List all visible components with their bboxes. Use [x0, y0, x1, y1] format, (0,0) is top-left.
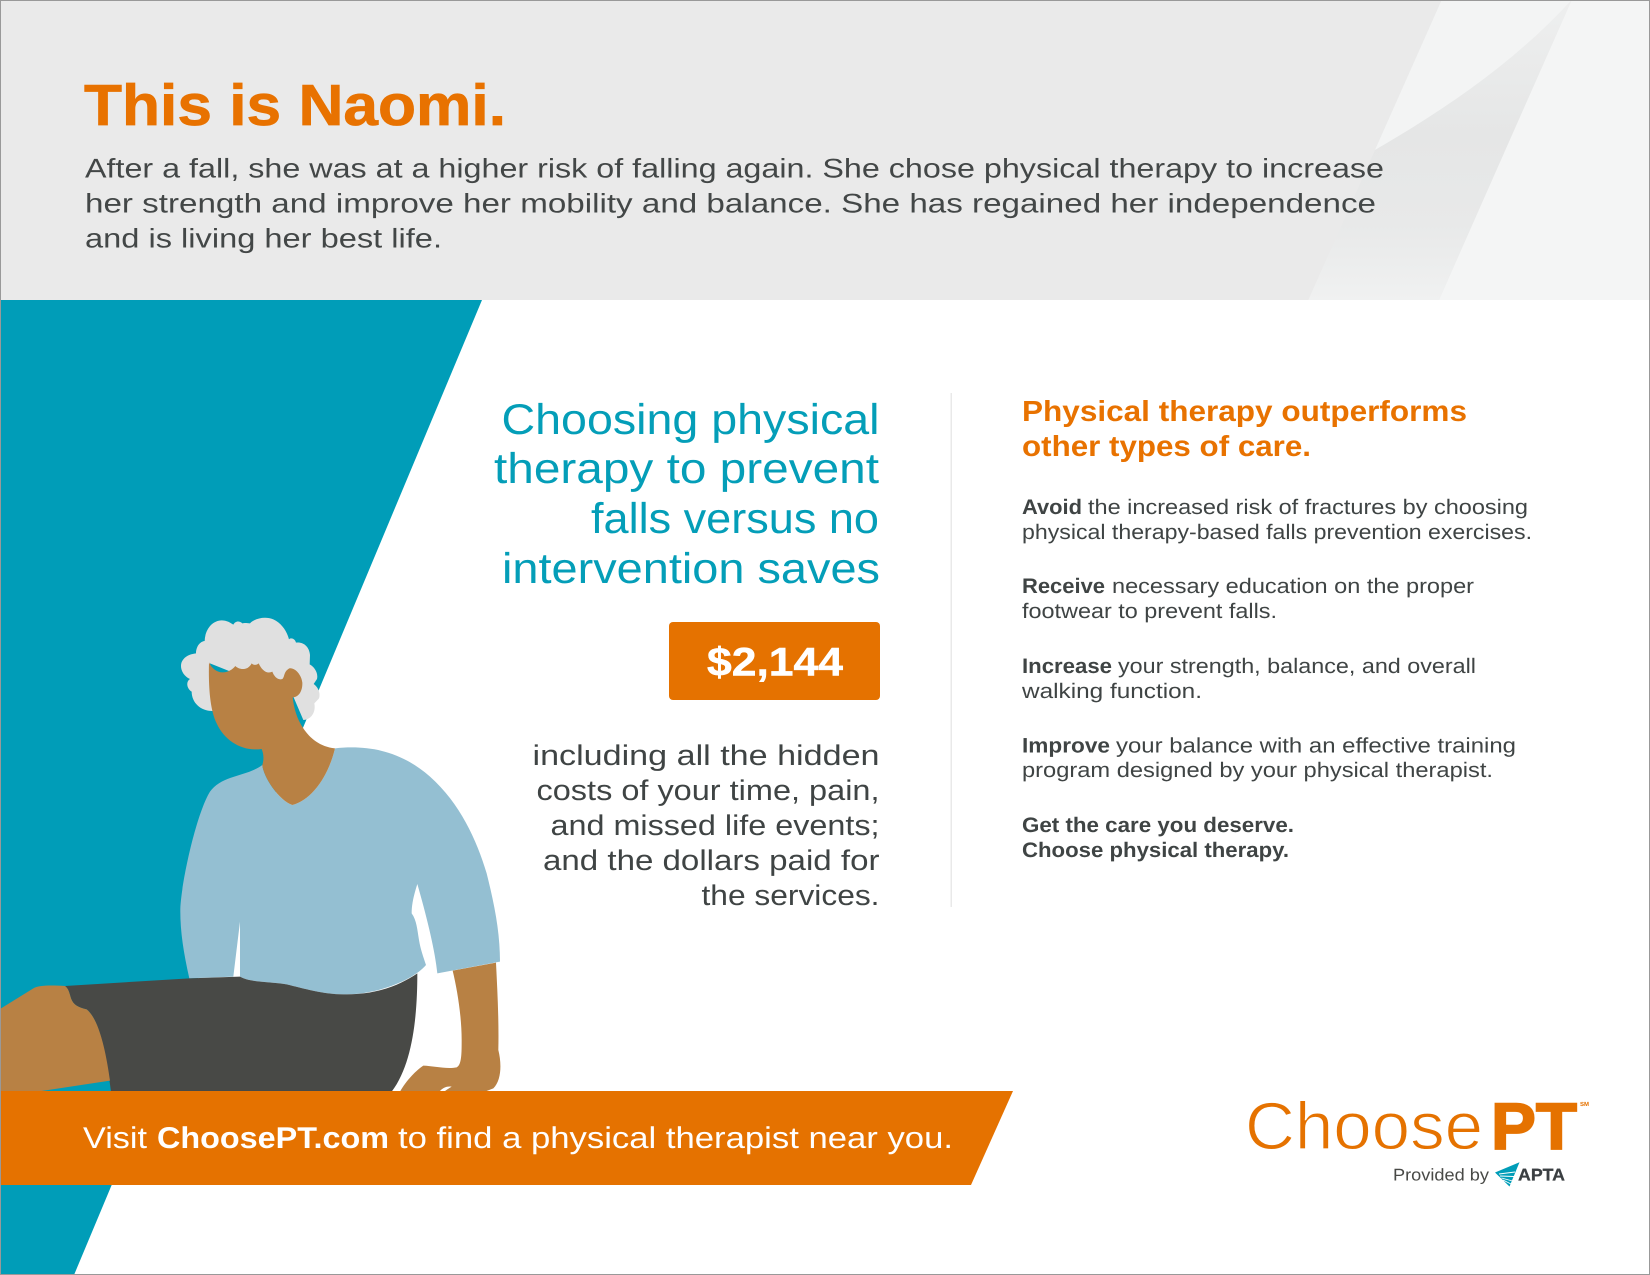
ChoosePT logo: SM [1580, 1101, 1589, 1108]
benefit: receive [1022, 575, 1474, 623]
intro paragraph: After a fall, she was at a higher risk of falling again. She chose physical therapy to increase [85, 154, 1384, 184]
benefit: improve: program designed by your physical therapist. [1022, 759, 1493, 782]
benefits list [1021, 496, 1532, 862]
banner text: to find a physical therapist near you. [398, 1122, 953, 1155]
hand gap [440, 1086, 452, 1091]
savings heading [494, 396, 880, 593]
benefit: increase: walking function. [1021, 680, 1202, 703]
title: This is Naomi. [84, 73, 506, 138]
ChoosePT logo: APTA [1518, 1166, 1565, 1184]
leg [0, 985, 110, 1091]
header band [0, 0, 1650, 300]
shorts [65, 973, 417, 1092]
intro paragraph: her strength and improve her mobility and balance. She has regained her independence [85, 188, 1376, 218]
benefit: avoid: the increased risk of fractures by choosing [1088, 496, 1528, 519]
ChoosePT logo: PT [1491, 1089, 1577, 1163]
benefit: increase: Increase [1022, 655, 1112, 678]
benefit: receive: Receive [1022, 575, 1105, 598]
closing statement: Choose physical therapy. [1022, 839, 1289, 862]
intro paragraph: and is living her best life. [85, 224, 442, 254]
savings explanation: and missed life events; [550, 810, 880, 842]
closing statement [1022, 814, 1294, 862]
savings explanation: costs of your time, pain, [536, 775, 880, 807]
banner text: ChoosePT.com [157, 1122, 389, 1155]
banner text [83, 1122, 953, 1155]
benefit: receive: footwear to prevent falls. [1022, 600, 1277, 623]
icon: APTA wing [1495, 1162, 1520, 1186]
benefit: avoid: physical therapy-based falls prevention exercises. [1022, 521, 1532, 544]
benefit: receive: necessary education on the proper [1112, 575, 1474, 598]
closing statement: Get the care you deserve. [1022, 814, 1294, 837]
benefits heading: other types of care. [1022, 431, 1311, 463]
benefit: improve: your balance with an effective training [1116, 734, 1516, 758]
ChoosePT logo [1245, 1089, 1589, 1186]
orange call-to-action banner [0, 1091, 1013, 1185]
benefits heading [1022, 396, 1467, 463]
benefit: avoid: Avoid [1022, 496, 1082, 519]
benefit: increase [1021, 655, 1476, 703]
intro paragraph [85, 154, 1384, 254]
ChoosePT logo: Choose [1245, 1089, 1483, 1164]
savings heading: Choosing physical [502, 396, 880, 444]
face and neck [209, 662, 335, 805]
banner text: Visit [83, 1122, 148, 1155]
benefits heading: Physical therapy outperforms [1022, 396, 1467, 428]
benefit: avoid [1022, 496, 1532, 544]
teal diagonal panel [0, 300, 482, 1275]
savings heading: therapy to prevent [494, 445, 879, 493]
arm and hand [400, 963, 500, 1092]
savings amount badge: $2,144 [707, 640, 844, 684]
illustration: Naomi seated [0, 618, 500, 1092]
savings heading: falls versus no [591, 495, 879, 543]
savings explanation: and the dollars paid for [543, 845, 880, 877]
savings explanation: including all the hidden [532, 740, 880, 772]
benefit: increase: your strength, balance, and overall [1118, 655, 1476, 678]
provided by line: Provided by [1393, 1166, 1490, 1184]
benefit: improve [1022, 734, 1516, 782]
savings explanation [532, 740, 880, 912]
savings explanation: the services. [702, 880, 880, 912]
shirt [180, 747, 500, 994]
savings amount badge [669, 622, 880, 700]
hair [181, 618, 320, 720]
benefit: improve: Improve [1022, 734, 1110, 758]
savings heading: intervention saves [502, 545, 880, 593]
